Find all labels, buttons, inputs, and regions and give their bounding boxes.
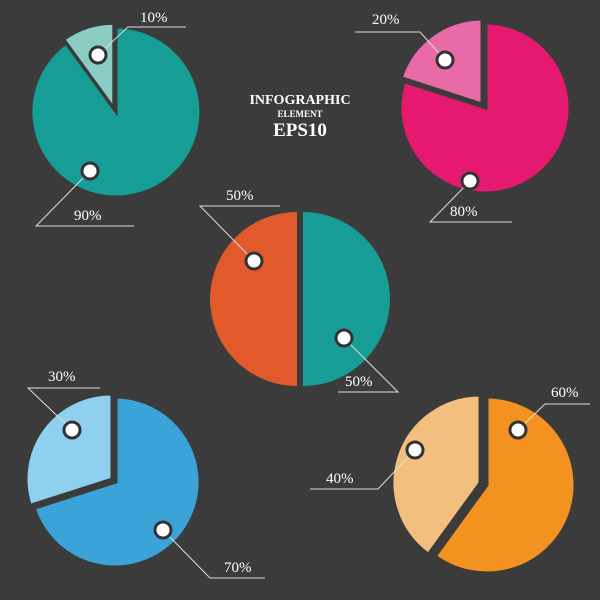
callout: 70% <box>155 522 265 578</box>
callout: 90%: 90% <box>74 208 102 224</box>
callout: 40% <box>310 442 423 489</box>
title <box>249 93 351 141</box>
callout: 20% <box>355 12 453 68</box>
callout: 50% top <box>200 188 280 269</box>
callout: 50% top: 50% <box>226 188 254 204</box>
pie: 30% / 70% <box>26 394 200 567</box>
callout: 90% <box>36 163 134 226</box>
callout: 50% bottom: 50% <box>345 374 372 390</box>
callout: 80% <box>430 173 512 222</box>
pie: 50% / 50% <box>210 212 390 386</box>
title: INFOGRAPHIC <box>249 93 351 108</box>
callout: 30% <box>28 369 100 438</box>
callout: 70%: 70% <box>224 560 252 576</box>
callout: 50% bottom <box>336 330 398 392</box>
callout: 60%: 60% <box>551 385 578 401</box>
callout: 10% <box>90 10 186 63</box>
pie: 10% / 90% <box>31 23 201 197</box>
callout: 30%: 30% <box>48 369 76 385</box>
callout: 60% <box>510 385 590 438</box>
callout: 80%: 80% <box>450 204 478 220</box>
title: ELEMENT <box>277 109 323 119</box>
title: EPS10 <box>273 120 327 141</box>
callout: 40%: 40% <box>326 471 354 487</box>
pie: 40% / 60% <box>392 395 575 573</box>
pie: 20% / 80% <box>400 19 570 193</box>
callout: 10%: 10% <box>140 10 168 26</box>
callout: 20%: 20% <box>372 12 400 28</box>
